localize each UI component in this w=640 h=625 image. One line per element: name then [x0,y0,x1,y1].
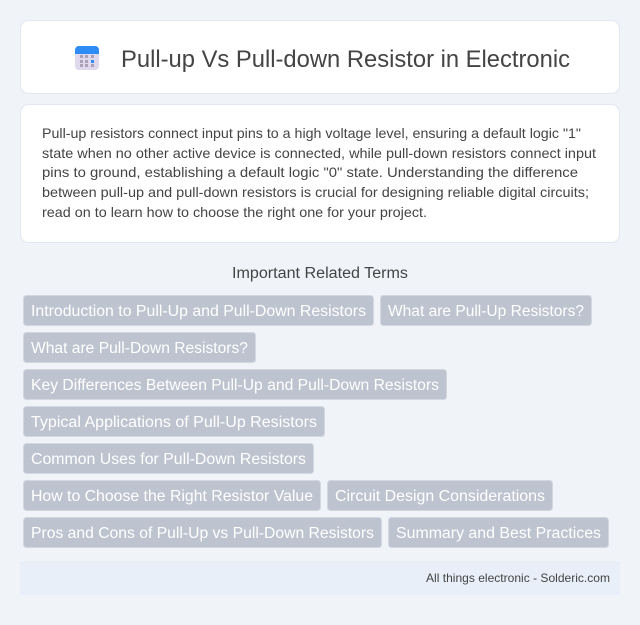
chip: Summary and Best Practices [396,525,601,542]
chip [24,444,314,474]
chip: How to Choose the Right Resistor Value [31,488,313,505]
term chips [24,296,608,548]
panel: description paragraph: state when no other active device is connected, while pull-down resistors connect input [42,145,596,161]
chip [24,406,324,436]
chip: Circuit Design Considerations [335,488,545,505]
panel: description paragraph: read on to learn how to choose the right one for your project. [42,204,427,220]
chip: Introduction to Pull-Up and Pull-Down Resistors [31,303,366,320]
chip: Pros and Cons of Pull-Up vs Pull-Down Resistors [31,525,374,542]
header panel [20,20,620,94]
chip [328,480,552,510]
chip [24,480,320,510]
chip [24,332,256,362]
chip [24,370,446,400]
chip: Common Uses for Pull-Down Resistors [31,451,306,468]
chip: What are Pull-Up Resistors? [388,303,584,320]
heading: important related terms: Important Related Terms [232,265,408,282]
footer: All things electronic - Solderic.com [426,571,610,585]
chip [380,296,592,326]
chip: What are Pull-Down Resistors? [31,340,248,357]
chip [24,296,374,326]
chip: Key Differences Between Pull-Up and Pull-Down Resistors [31,377,439,394]
icon: calendar grid [75,46,99,70]
chip [388,518,608,548]
chip: Typical Applications of Pull-Up Resistors [31,414,317,431]
panel: description paragraph [20,104,620,242]
footer [20,561,620,595]
panel: description paragraph: Pull-up resistors connect input pins to a high voltage level, ensuring a default logic "1" [42,125,581,141]
chip [24,518,382,548]
panel: description paragraph: between pull-up and pull-down resistors is crucial for designing reliable digital circuits; [42,184,589,200]
title: Pull-up Vs Pull-down Resistor in Electronic [121,46,570,73]
panel: description paragraph: pins to ground, establishing a default logic "0" state. Understanding the difference [42,164,578,180]
